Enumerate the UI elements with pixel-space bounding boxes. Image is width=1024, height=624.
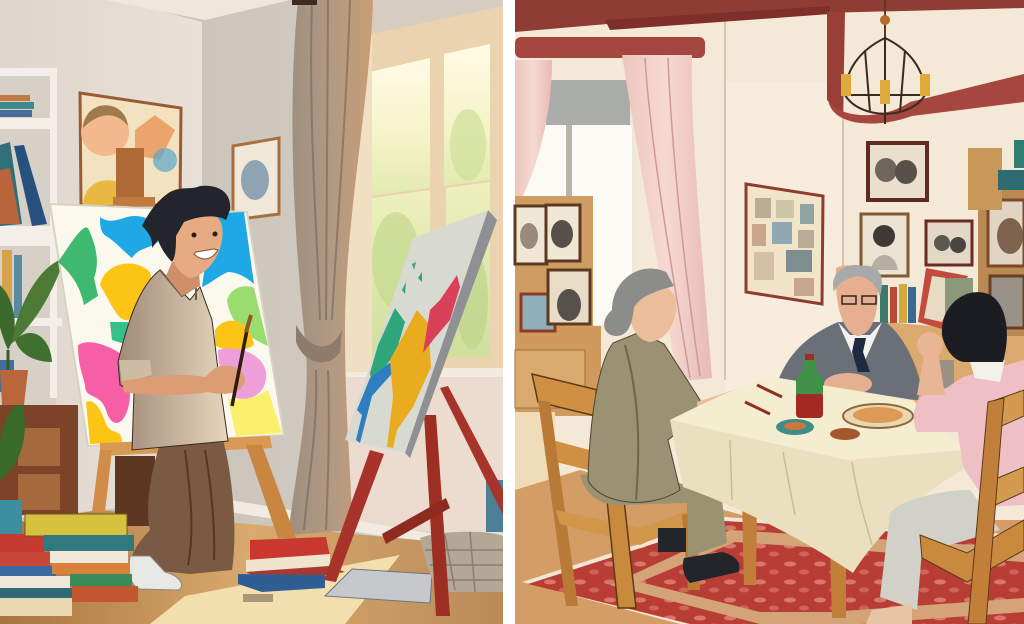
lit wall near the window xyxy=(345,0,503,540)
rug xyxy=(522,517,1024,624)
floor xyxy=(0,510,503,624)
arm xyxy=(122,366,245,395)
right pink curtain xyxy=(622,55,712,382)
woman xyxy=(580,268,752,583)
large canvas with paint blobs xyxy=(50,204,284,446)
right post xyxy=(596,392,636,608)
wall xyxy=(515,0,1024,624)
ceiling xyxy=(105,0,290,20)
back shoe xyxy=(658,528,686,552)
torso xyxy=(914,360,1024,507)
framed couple xyxy=(926,221,972,265)
bowl contents xyxy=(784,422,806,430)
cloth drop xyxy=(670,420,963,573)
wall painting: portrait xyxy=(80,93,181,206)
panel: dining scene xyxy=(515,0,1024,624)
coat xyxy=(588,332,700,502)
collar xyxy=(970,360,1005,382)
shirt xyxy=(118,270,228,450)
right cabinet with photos xyxy=(968,140,1024,336)
foot xyxy=(866,604,912,624)
panel: painting scene xyxy=(0,0,503,624)
paintbrush xyxy=(232,330,247,406)
blue object by wall xyxy=(486,480,503,532)
small easel behind boy xyxy=(92,436,296,538)
right chair xyxy=(920,390,1024,624)
framed portrait xyxy=(861,214,908,276)
front canvas with paint xyxy=(345,210,497,458)
eyes xyxy=(192,232,196,238)
collage frame xyxy=(746,184,823,304)
book stack centre xyxy=(238,537,345,592)
forearm xyxy=(697,388,752,422)
small bowl xyxy=(776,419,814,435)
floor xyxy=(515,470,1024,624)
rail top xyxy=(532,374,612,420)
bookshelf xyxy=(0,68,62,408)
basket xyxy=(420,532,503,592)
table xyxy=(670,377,963,618)
red paint xyxy=(423,275,460,353)
window xyxy=(345,6,503,377)
sleeve cuff xyxy=(119,360,152,384)
front easel xyxy=(324,386,503,616)
glasses xyxy=(243,594,273,602)
smile xyxy=(194,249,218,259)
blue paint xyxy=(356,357,397,443)
hair xyxy=(142,186,230,262)
book pile left xyxy=(0,500,138,616)
shoe xyxy=(683,552,739,583)
older man xyxy=(777,265,921,400)
hands xyxy=(917,332,943,358)
cloth top xyxy=(670,377,963,460)
leg xyxy=(580,470,727,557)
rail mid xyxy=(552,440,612,476)
wall below window xyxy=(345,377,503,540)
plant xyxy=(0,258,65,480)
brushes on table xyxy=(745,385,782,414)
trousers xyxy=(131,436,234,574)
forearm xyxy=(917,350,945,395)
small framed picture xyxy=(233,138,279,220)
plate xyxy=(843,404,913,428)
curtain xyxy=(288,0,373,535)
hair xyxy=(942,292,1007,362)
baseboard xyxy=(230,500,503,555)
left wall xyxy=(0,0,202,520)
side cabinet xyxy=(0,405,78,515)
bottle xyxy=(796,354,823,418)
boy xyxy=(118,186,251,590)
open notebook on floor xyxy=(325,569,432,603)
left post xyxy=(538,400,578,606)
hair xyxy=(604,268,674,336)
wall shelf with books xyxy=(880,268,1024,420)
trousers xyxy=(880,490,1000,610)
green paint xyxy=(370,308,405,385)
left pink curtain xyxy=(515,60,552,210)
light patch on floor xyxy=(150,555,400,624)
round dish xyxy=(830,428,860,440)
cabinet with photos xyxy=(515,196,601,497)
seat xyxy=(556,505,703,545)
ceiling beams xyxy=(515,0,1024,123)
back wall xyxy=(0,0,503,624)
window xyxy=(520,80,636,325)
green specks xyxy=(402,262,422,294)
framed photo top xyxy=(868,143,927,200)
neck and head xyxy=(166,258,200,296)
seated person at right xyxy=(866,292,1024,624)
chandelier xyxy=(841,0,930,124)
head xyxy=(627,281,676,342)
woman's chair xyxy=(532,374,703,608)
yellow paint xyxy=(387,310,431,448)
table legs xyxy=(742,500,757,585)
shoe xyxy=(129,556,182,590)
